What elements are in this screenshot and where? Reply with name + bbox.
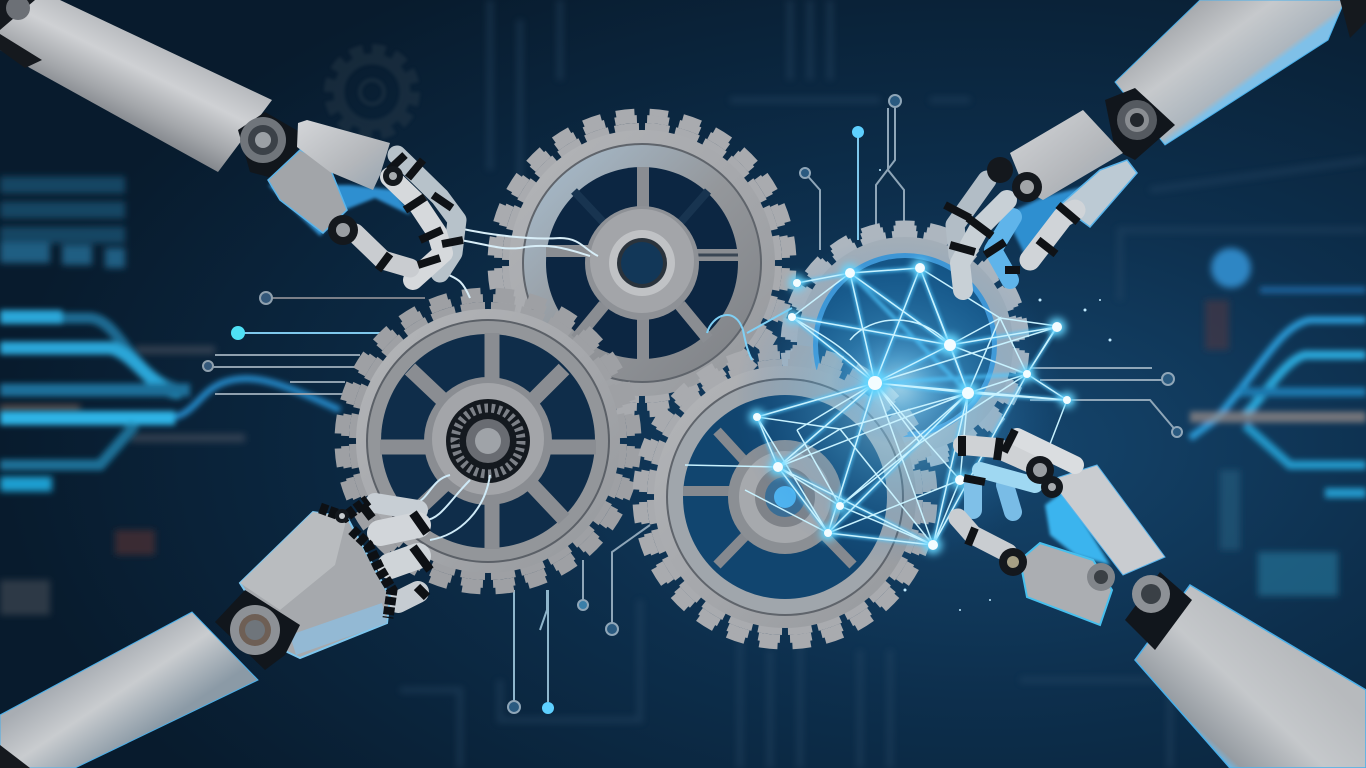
- blue underglow: [1045, 490, 1110, 565]
- sparkle particles: [879, 169, 1112, 611]
- background: faint circuitry panels: [400, 0, 1366, 768]
- knuckle strips: [320, 500, 430, 618]
- forearm: [0, 0, 272, 172]
- wires from hands to gears: [412, 228, 598, 540]
- circuit traces: left: [203, 292, 425, 394]
- blue wire loop: [707, 308, 792, 360]
- robot arm: top left: [0, 0, 463, 280]
- circuit traces: top: [800, 95, 904, 250]
- lower palm: [268, 150, 347, 233]
- palm: [240, 512, 390, 658]
- wrist: [215, 590, 300, 670]
- thumb side palm: [1060, 160, 1137, 227]
- upper palm: [1010, 110, 1123, 200]
- lower palm: [1020, 543, 1112, 625]
- gear: left: [338, 291, 638, 591]
- network glow: [735, 235, 1065, 565]
- background: right blurred shapes: [1205, 248, 1338, 596]
- gear: top center: [491, 112, 793, 414]
- neural network lines: soft glow: [757, 268, 1067, 545]
- circuit traces: bottom: [508, 525, 650, 714]
- robot arm: bottom right: [958, 430, 1366, 768]
- robot arm: top right: [945, 0, 1366, 290]
- robot arm: bottom left: [0, 500, 430, 768]
- circuit traces: right: [1030, 368, 1182, 437]
- neural network nodes: [749, 259, 1075, 554]
- fingers: [375, 503, 418, 602]
- background: blurred gear silhouette: [329, 49, 415, 135]
- background: left glowing flow lines: [0, 317, 340, 465]
- background: left blurred data bars: [0, 185, 245, 615]
- wrist: [238, 112, 305, 180]
- blue underglow: [268, 185, 410, 236]
- blue underglow: [1005, 185, 1090, 255]
- fingers: [355, 155, 463, 280]
- upper hand: [1050, 465, 1165, 575]
- neural network lines: [685, 268, 1067, 545]
- gear: right with glowing network: [783, 223, 1027, 467]
- gear: bottom right: [636, 348, 934, 646]
- background: right glowing flow lines: [1190, 290, 1366, 493]
- upper palm: [297, 120, 390, 190]
